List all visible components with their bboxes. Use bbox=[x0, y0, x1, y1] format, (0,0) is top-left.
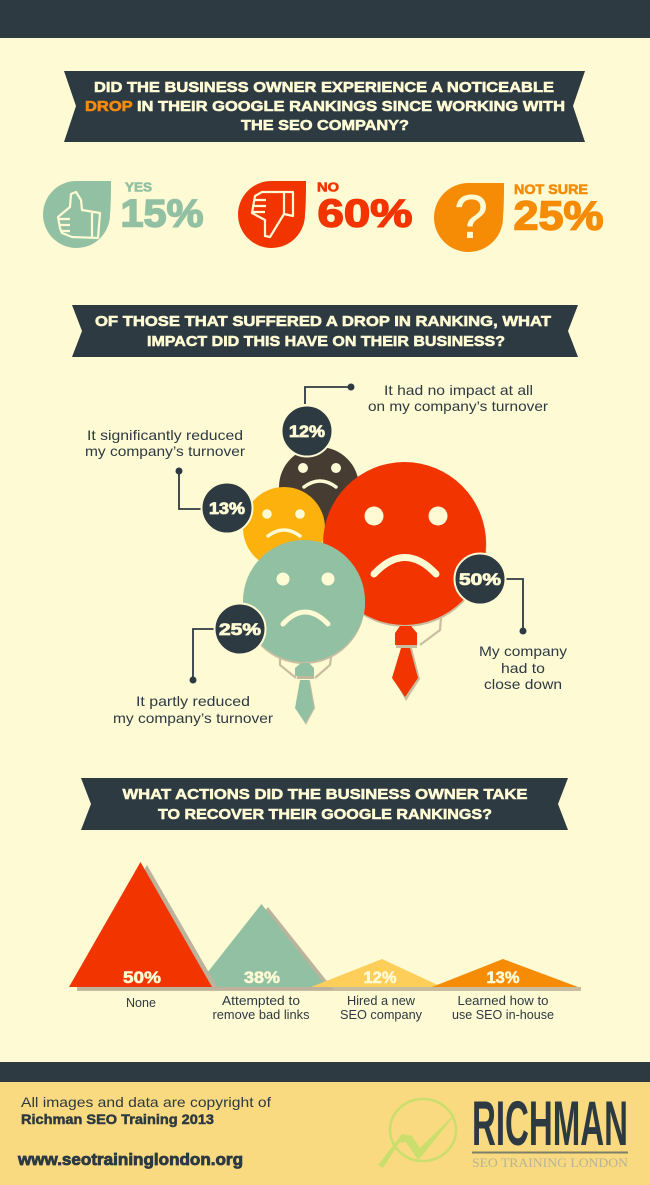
chart: triangle chart of recovery actions bbox=[69, 862, 581, 1022]
callout: 12% no impact: It had no impact at all bbox=[384, 382, 533, 398]
copyright text: All images and data are copyright of bbox=[21, 1094, 271, 1110]
icon: thumbs up bbox=[43, 181, 111, 248]
icon: question mark: ? bbox=[454, 183, 488, 252]
label: attempted to remove bad links: remove bad links bbox=[212, 1008, 310, 1022]
callout: 25% partly reduced: It partly reduced bbox=[136, 693, 250, 709]
banner: drop in rankings question: DID THE BUSINESS OWNER EXPERIENCE A NOTICEABLE bbox=[94, 79, 554, 96]
face: red 50% with tie bbox=[323, 462, 486, 701]
face: green 25% with tie bbox=[243, 540, 365, 725]
stat: no 60%: 60% bbox=[318, 192, 412, 236]
callout: 12% no impact: on my company’s turnover bbox=[368, 398, 548, 414]
callout: 13% significantly reduced: It significantly reduced bbox=[87, 427, 243, 443]
banner: business impact question: OF THOSE THAT SUFFERED A DROP IN RANKING, WHAT bbox=[95, 313, 551, 330]
triangle: new SEO company 12%: 12% bbox=[364, 968, 396, 987]
callout: 50% close down bbox=[454, 554, 567, 692]
banner: recovery actions question: WHAT ACTIONS DID THE BUSINESS OWNER TAKE bbox=[122, 786, 528, 803]
triangle: none 50%: 50% bbox=[123, 968, 161, 987]
icon: question mark bbox=[434, 183, 504, 252]
triangle: remove bad links 38% bbox=[196, 904, 334, 990]
label: hired a new SEO company: SEO company bbox=[340, 1008, 423, 1022]
callout: 13% significantly reduced bbox=[85, 427, 252, 534]
chart: sad faces by impact bbox=[85, 382, 567, 726]
stat: yes 15%: YES bbox=[125, 180, 152, 194]
callout: 13% significantly reduced: my company’s turnover bbox=[85, 443, 245, 459]
banner: drop in rankings question: DROP IN THEIR GOOGLE RANKINGS SINCE WORKING WITH bbox=[85, 98, 565, 115]
stat: not sure 25%: 25% bbox=[514, 192, 604, 238]
label: none: None bbox=[126, 996, 156, 1010]
top band bbox=[0, 0, 650, 38]
callout: 50% close down: close down bbox=[484, 676, 562, 692]
label: attempted to remove bad links: Attempted to bbox=[222, 994, 300, 1008]
banner: recovery actions question: TO RECOVER THEIR GOOGLE RANKINGS? bbox=[158, 806, 492, 823]
logo: checkmark bbox=[378, 1099, 458, 1168]
callout: 13% significantly reduced: 13% bbox=[209, 500, 245, 518]
copyright text bbox=[21, 1094, 271, 1127]
triangle: remove bad links 38%: 38% bbox=[244, 968, 280, 987]
callout: 12% no impact bbox=[282, 382, 548, 456]
triangle: SEO in-house 13%: 13% bbox=[486, 968, 520, 987]
banner: business impact question bbox=[72, 305, 578, 357]
label: learned SEO in-house: Learned how to bbox=[458, 994, 549, 1008]
label: hired a new SEO company: Hired a new bbox=[347, 994, 416, 1008]
label: learned SEO in-house bbox=[452, 994, 554, 1022]
website url: www.seotraininglondon.org bbox=[17, 1151, 243, 1169]
face: dark 12% bbox=[279, 447, 359, 527]
icon: thumbs down bbox=[238, 181, 306, 248]
banner: drop in rankings question: THE SEO COMPANY? bbox=[241, 117, 409, 134]
footer bbox=[0, 1062, 650, 1185]
label: attempted to remove bad links bbox=[212, 994, 310, 1022]
stat: no 60% bbox=[238, 180, 412, 248]
callout: 12% no impact: 12% bbox=[289, 423, 325, 441]
triangle: SEO in-house 13% bbox=[432, 959, 578, 987]
triangle: new SEO company 12% bbox=[311, 959, 442, 987]
stat: not sure 25% bbox=[434, 182, 604, 252]
stat: yes 15% bbox=[43, 180, 203, 248]
face: yellow 13% bbox=[243, 487, 325, 569]
stat: not sure 25%: NOT SURE bbox=[514, 182, 588, 197]
callout: 25% partly reduced bbox=[113, 604, 273, 726]
stat: no 60%: NO bbox=[317, 180, 339, 194]
banner: drop in rankings question bbox=[64, 71, 585, 142]
label: learned SEO in-house: use SEO in-house bbox=[452, 1008, 554, 1022]
callout: 25% partly reduced: 25% bbox=[219, 621, 261, 639]
callout: 50% close down: My company bbox=[479, 643, 567, 659]
copyright text: Richman SEO Training 2013 bbox=[21, 1111, 214, 1127]
label: hired a new SEO company bbox=[340, 994, 423, 1022]
banner: recovery actions question bbox=[81, 778, 568, 830]
banner: business impact question: IMPACT DID THIS HAVE ON THEIR BUSINESS? bbox=[147, 333, 505, 350]
callout: 50% close down: 50% bbox=[459, 571, 501, 589]
logo: wordmark: SEO TRAINING LONDON bbox=[472, 1156, 628, 1170]
callout: 25% partly reduced: my company’s turnover bbox=[113, 710, 273, 726]
triangle: none 50% bbox=[69, 862, 219, 990]
callout: 50% close down: had to bbox=[501, 660, 545, 676]
stat: yes 15%: 15% bbox=[120, 192, 204, 236]
